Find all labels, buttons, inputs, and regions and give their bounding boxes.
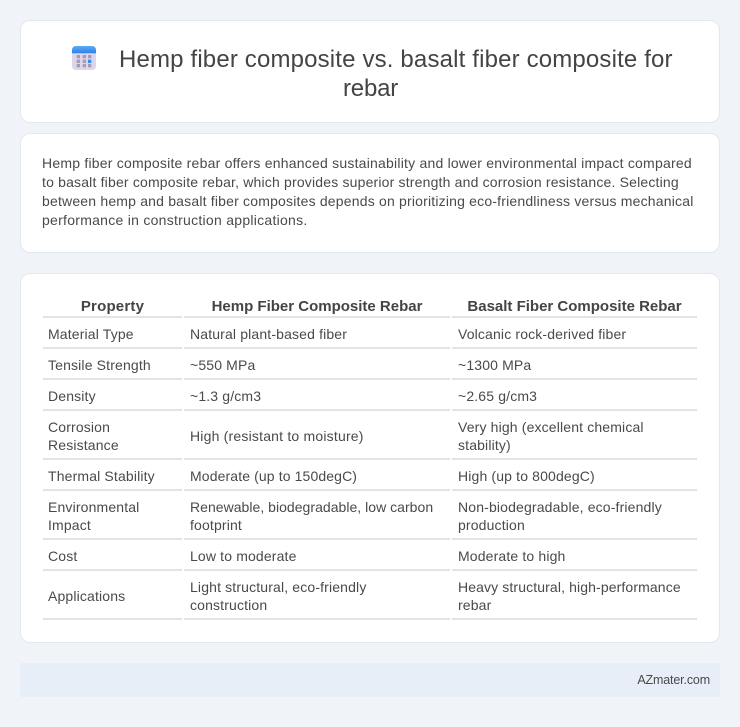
table rows: ~1.3 g/cm3: [190, 388, 261, 404]
table rows: Low to moderate: [190, 548, 297, 564]
table rows: Moderate to high: [458, 548, 565, 564]
title: Hemp fiber composite vs. basalt fiber composite for: [119, 46, 673, 73]
footer credit: AZmater.com: [637, 673, 710, 687]
title: [119, 46, 673, 102]
table rows: construction: [190, 597, 267, 613]
table header: [81, 298, 682, 315]
table header: Basalt Fiber Composite Rebar: [467, 298, 682, 315]
table rows: Environmental: [48, 499, 139, 515]
table rows: Heavy structural, high-performance: [458, 579, 681, 595]
panel: summary text: [20, 133, 720, 253]
table rows: Corrosion: [48, 419, 110, 435]
table rows: [43, 326, 697, 620]
table rows: Resistance: [48, 437, 119, 453]
table rows: Material Type: [48, 326, 134, 342]
table rows: High (up to 800degC): [458, 468, 595, 484]
table rows: Cost: [48, 548, 77, 564]
panel: summary text: between hemp and basalt fiber composites depends on prioritizing eco-friendliness versus mechanical: [42, 193, 694, 209]
table header: Hemp Fiber Composite Rebar: [212, 298, 422, 315]
table rows: Thermal Stability: [48, 468, 155, 484]
title: rebar: [343, 75, 398, 102]
footer bar: [20, 663, 720, 697]
table rows: ~550 MPa: [190, 357, 255, 373]
table rows: High (resistant to moisture): [190, 428, 364, 444]
table rows: Very high (excellent chemical: [458, 419, 644, 435]
table rows: Applications: [48, 588, 125, 604]
panel: title card: [20, 20, 720, 123]
table rows: Moderate (up to 150degC): [190, 468, 357, 484]
table rows: ~1300 MPa: [458, 357, 531, 373]
table rows: Impact: [48, 517, 91, 533]
panel: summary text: Hemp fiber composite rebar offers enhanced sustainability and lower environmental impact compared: [42, 155, 692, 171]
table rows: Non-biodegradable, eco-friendly: [458, 499, 662, 515]
table rows: Renewable, biodegradable, low carbon: [190, 499, 433, 515]
table rows: Volcanic rock-derived fiber: [458, 326, 626, 342]
table rows: Tensile Strength: [48, 357, 151, 373]
icon: calendar: [72, 46, 96, 70]
table rows: stability): [458, 437, 511, 453]
table rows: ~2.65 g/cm3: [458, 388, 537, 404]
panel: summary text: performance in construction applications.: [42, 212, 308, 228]
table rows: rebar: [458, 597, 491, 613]
table rows: Density: [48, 388, 96, 404]
table rows: footprint: [190, 517, 242, 533]
panel: summary text: to basalt fiber composite rebar, which provides superior strength and corrosion resistance. Selecting: [42, 174, 679, 190]
table header: Property: [81, 298, 144, 315]
table rows: production: [458, 517, 525, 533]
table rows: Light structural, eco-friendly: [190, 579, 366, 595]
panel: comparison table: [20, 273, 720, 643]
table rows: Natural plant-based fiber: [190, 326, 347, 342]
